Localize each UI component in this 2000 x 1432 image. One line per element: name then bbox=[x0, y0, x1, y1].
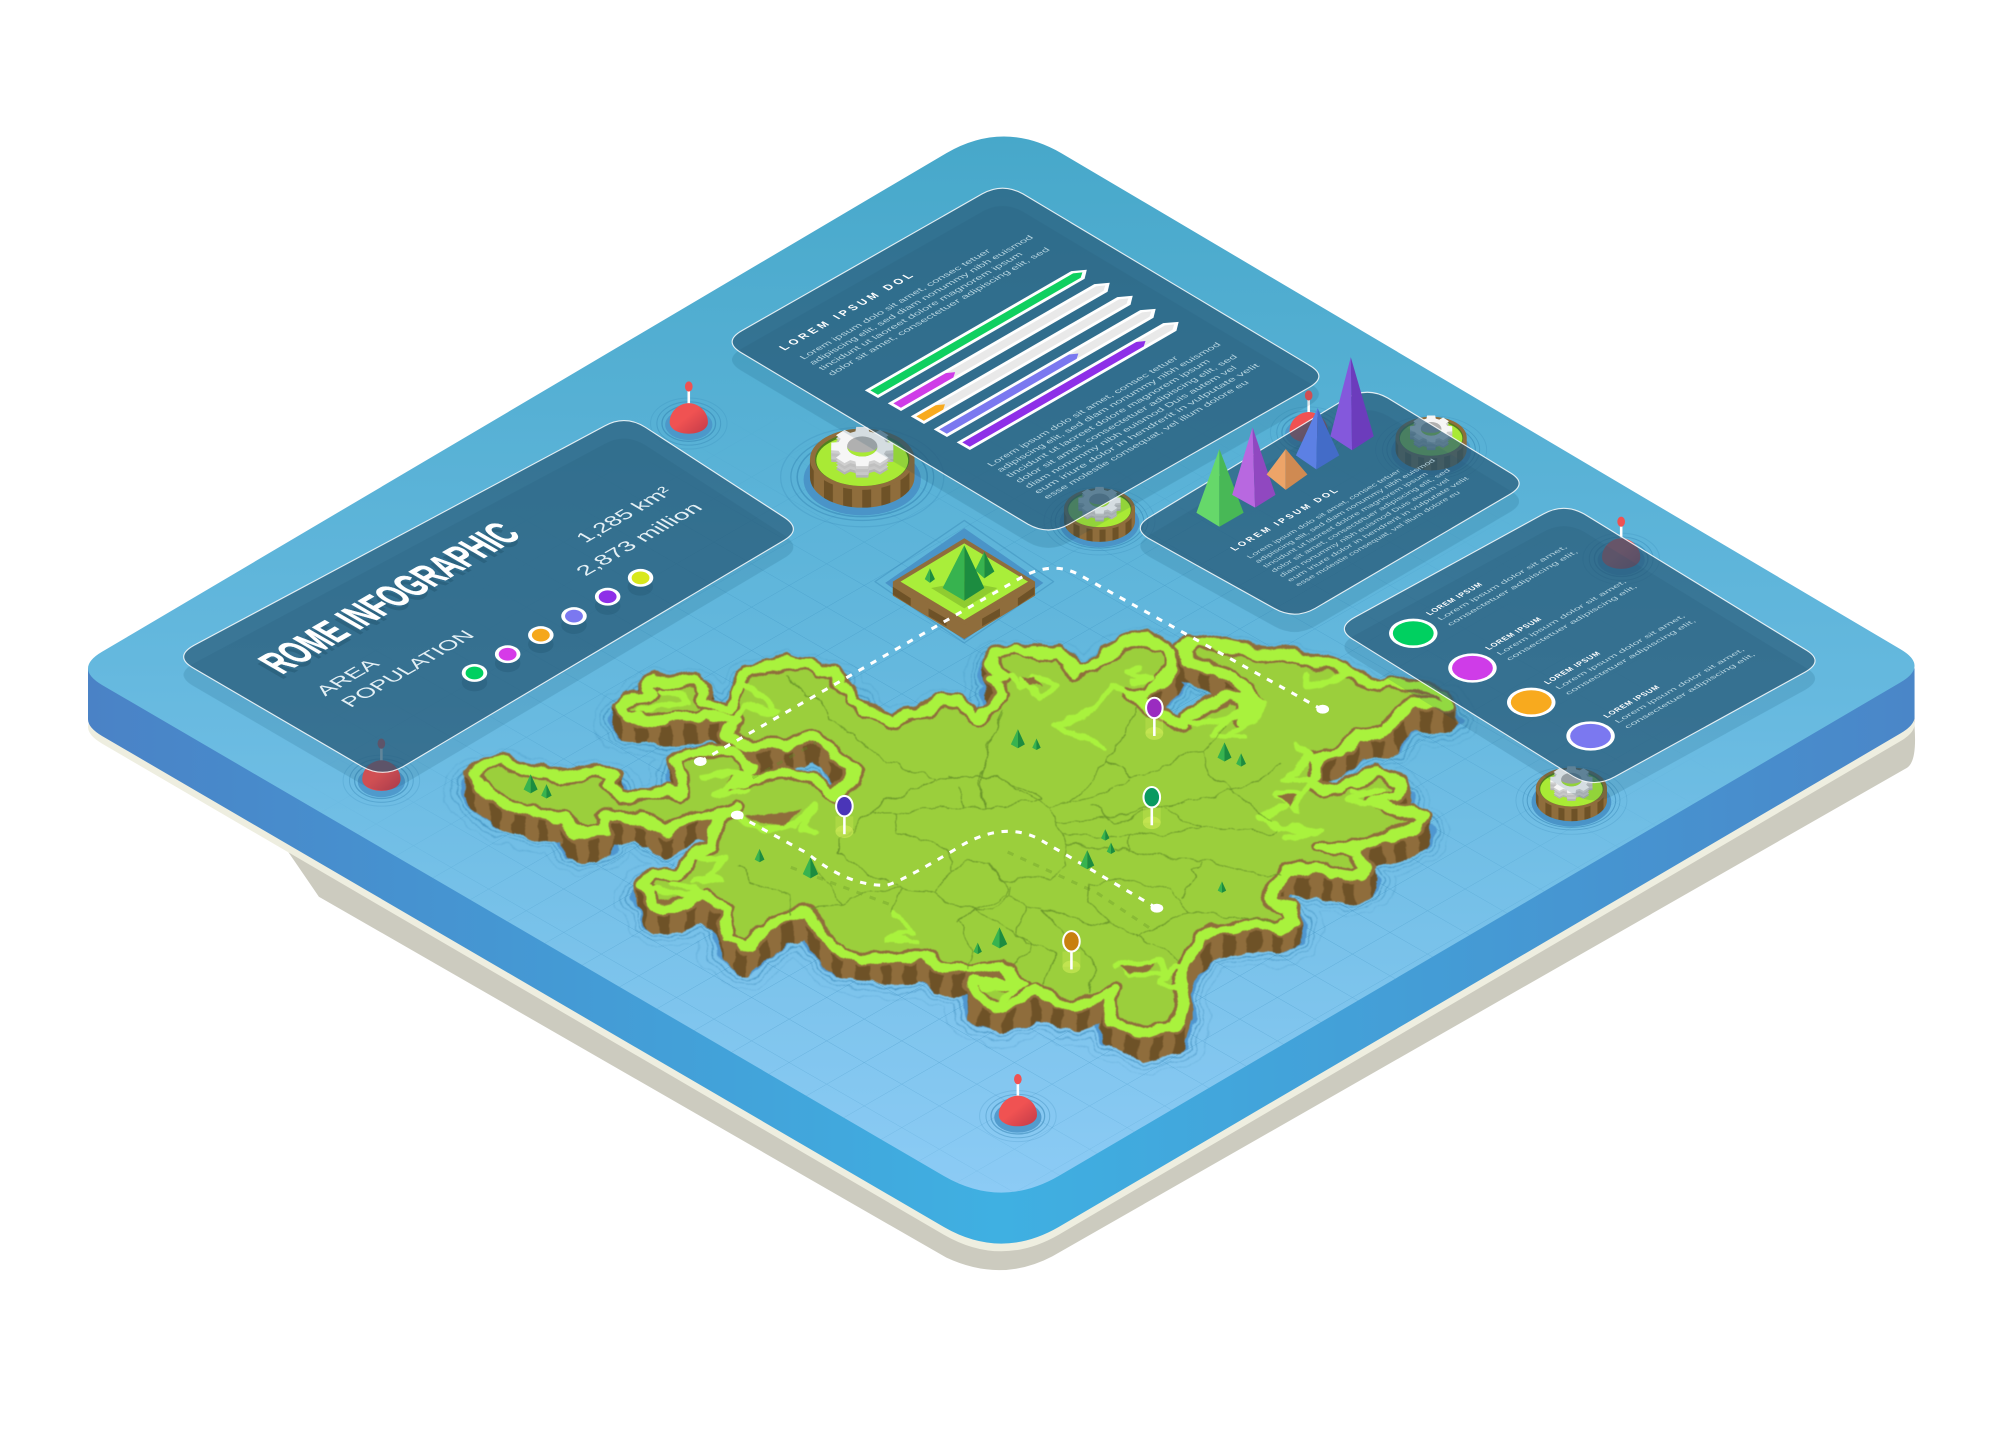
legend item 3: Lorem ipsum dolor sit amet, bbox=[1554, 614, 1688, 691]
paragraph: esse molestie consequat, vel illum dolore eu bbox=[1294, 490, 1463, 588]
paragraph one bbox=[798, 228, 1055, 377]
panel: legend list bbox=[1344, 508, 1815, 783]
panel: pyramid chart bbox=[1140, 357, 1519, 614]
route end dots bbox=[694, 705, 1329, 913]
legend item 1: consectetuer adipiscing elit, bbox=[1446, 550, 1580, 627]
bar: magenta bbox=[888, 279, 1116, 411]
paragraph two bbox=[985, 335, 1272, 500]
buoy: south bbox=[980, 1074, 1056, 1142]
value: population: 2,873 million bbox=[572, 500, 708, 579]
dashed route shadows bbox=[753, 742, 1154, 931]
pyramid: blue bbox=[1296, 408, 1339, 469]
legend item 2 bbox=[1448, 572, 1639, 683]
legend dots bbox=[462, 569, 653, 691]
buoy: north-west bbox=[651, 381, 727, 449]
inner lime coast details bbox=[639, 667, 1397, 1003]
heading: LOREM IPSUM DOL bbox=[777, 271, 917, 352]
legend item 4: Lorem ipsum dolor sit amet, bbox=[1614, 647, 1747, 724]
paragraph: diam nonummy nibh euismod Duis autem vel bbox=[1278, 478, 1453, 578]
heading: LOREM IPSUM DOL bbox=[1228, 487, 1341, 552]
water ripples around island bbox=[444, 636, 1475, 1075]
value: area: 1,285 km² bbox=[572, 484, 678, 546]
buoy: north-east bbox=[1270, 390, 1347, 458]
buoys bbox=[343, 381, 1659, 1142]
coast lime band bbox=[473, 640, 1448, 1033]
bar: green bbox=[865, 266, 1093, 398]
pin: purple bbox=[1145, 698, 1163, 740]
legend item 1 bbox=[1389, 537, 1580, 648]
inlet lakes bbox=[746, 677, 1295, 973]
platform top face bbox=[88, 136, 1915, 1193]
pin: green bbox=[1143, 787, 1161, 829]
paragraph two: adipiscing elit, sed diam nonummy nibh euismod bbox=[994, 341, 1224, 473]
paragraph bbox=[1246, 453, 1479, 588]
pyramid: green bbox=[1196, 449, 1244, 527]
buoy: west bbox=[343, 739, 420, 806]
paragraph: eum iriure dolor in hendrerit in vulputate velit bbox=[1286, 476, 1471, 583]
paragraph: tincidunt ut laoreet dolore magnorem ipsum bbox=[1262, 471, 1431, 569]
map pins bbox=[835, 698, 1163, 973]
map grid bbox=[406, 492, 1605, 1191]
legend item 4 bbox=[1566, 640, 1758, 751]
gear island: large bbox=[781, 427, 944, 527]
pyramid: violet bbox=[1330, 357, 1374, 450]
paragraph two: Lorem ipsum dolo sit amet, consec tetuer bbox=[985, 355, 1181, 468]
paragraph two: dolor sit amet, consectetuer adipiscing elit, sed bbox=[1013, 353, 1240, 484]
legend item 2: Lorem ipsum dolor sit amet, bbox=[1496, 579, 1629, 656]
bar: orange bbox=[911, 292, 1139, 424]
title: ROME INFOGRAPHIC bbox=[249, 517, 531, 680]
title shadow: ROME INFOGRAPHIC bbox=[249, 522, 531, 685]
legend item 1: LOREM IPSUM bbox=[1424, 581, 1485, 616]
island land surface bbox=[473, 640, 1448, 1033]
legend item 3: consectetuer adipiscing elit, bbox=[1564, 619, 1698, 696]
tile island with trees bbox=[875, 520, 1054, 643]
paragraph: dolor sit amet, consectetuer adipiscing elit, sed bbox=[1270, 468, 1453, 574]
paragraph: adipiscing elit, sed diam nonummy nibh euismod bbox=[1254, 458, 1438, 564]
map: island bbox=[444, 628, 1475, 1075]
legend item 1: Lorem ipsum dolor sit amet, bbox=[1436, 545, 1570, 622]
pyramid chart bbox=[1196, 357, 1374, 527]
panel shadows bbox=[184, 206, 1815, 800]
panel: top text and bars bbox=[732, 188, 1319, 530]
gear island: centre bbox=[1044, 487, 1155, 555]
gear island: south-east bbox=[1516, 766, 1627, 834]
legend item 3: LOREM IPSUM bbox=[1542, 650, 1603, 685]
paragraph one: adipiscing elit, sed diam nonummy nibh euismod bbox=[807, 234, 1036, 366]
platform base shadow bbox=[288, 676, 1915, 1270]
paragraph one: tincidunt ut laoreet dolore magnorem ipsum bbox=[816, 251, 1025, 372]
legend item 2: LOREM IPSUM bbox=[1483, 616, 1544, 651]
legend item 3 bbox=[1507, 606, 1698, 717]
gear island: north-east bbox=[1376, 415, 1487, 483]
paragraph one: dolor sit amet, consectetuer adipiscing elit, sed bbox=[826, 246, 1053, 377]
road network bbox=[739, 675, 1283, 993]
trees on island bbox=[524, 729, 1246, 954]
bar: purple bbox=[957, 318, 1185, 450]
platform side wall bbox=[88, 188, 1915, 1244]
buoy: east bbox=[1583, 517, 1659, 584]
gear islands bbox=[781, 415, 1627, 834]
paragraph: Lorem ipsum dolo sit amet, consec tetuer bbox=[1246, 468, 1404, 560]
dashed routes bbox=[700, 568, 1321, 908]
paragraph two: tincidunt ut laoreet dolore magnorem ipsum bbox=[1004, 358, 1213, 479]
paragraph two: esse molestie consequat, vel illum dolore eu bbox=[1041, 379, 1251, 500]
pin: blue bbox=[835, 796, 853, 838]
legend item 4: LOREM IPSUM bbox=[1601, 684, 1662, 719]
bar chart bbox=[865, 266, 1185, 450]
platform cream edge bbox=[88, 195, 1915, 1251]
label: area: AREA bbox=[311, 656, 385, 699]
panel: title bbox=[184, 421, 793, 772]
paragraph two: diam nonummy nibh euismod Duis autem vel bbox=[1023, 364, 1239, 490]
legend item 2: consectetuer adipiscing elit, bbox=[1505, 584, 1639, 662]
paragraph two: eum iriure dolor in hendrerit in vulputate velit bbox=[1032, 362, 1263, 495]
bar: periwinkle bbox=[934, 305, 1162, 437]
legend item 4: consectetuer adipiscing elit, bbox=[1623, 652, 1758, 730]
pin: orange bbox=[1062, 931, 1080, 973]
island cliff sides bbox=[473, 643, 1448, 1053]
pyramid: purple bbox=[1232, 427, 1276, 508]
pyramid: orange bbox=[1267, 449, 1307, 490]
paragraph one: Lorem ipsum dolo sit amet, consec tetuer bbox=[798, 248, 993, 361]
label: population: POPULATION bbox=[337, 628, 480, 710]
